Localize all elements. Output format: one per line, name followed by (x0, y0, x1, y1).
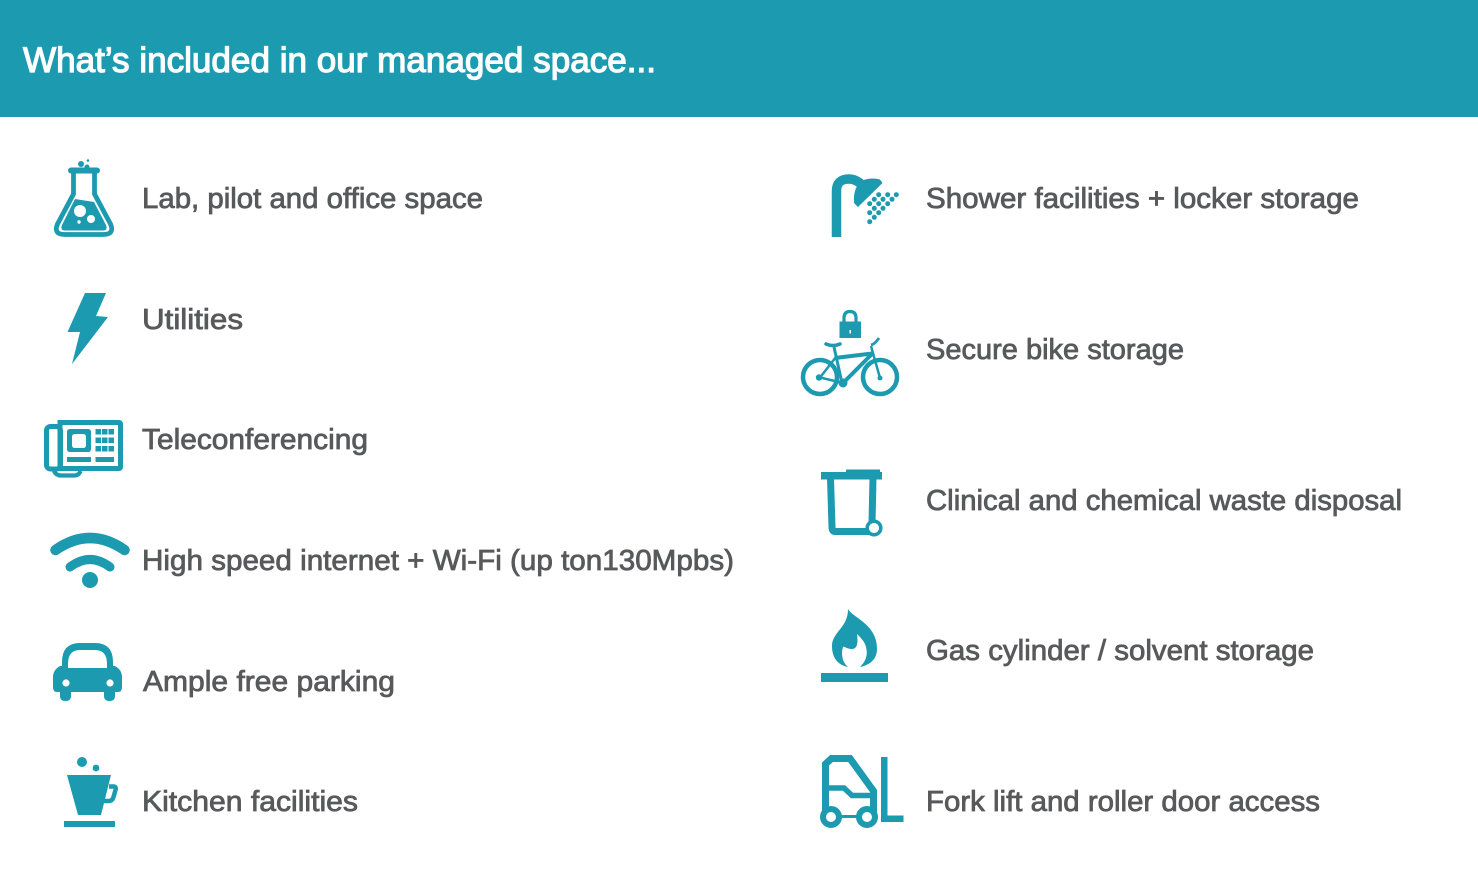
icon: wifi (56, 538, 124, 588)
label: gas storage: Gas cylinder / solvent storage (926, 635, 1314, 667)
label: parking: Ample free parking (143, 666, 395, 698)
label: internet: High speed internet + Wi-Fi (up ton130Mpbs) (142, 545, 734, 577)
label: bike storage: Secure bike storage (926, 334, 1184, 366)
label: shower: Shower facilities + locker storage (926, 183, 1359, 215)
label: waste disposal: Clinical and chemical waste disposal (926, 485, 1402, 517)
icon: lab flask (56, 159, 112, 234)
icon: forklift (823, 757, 904, 825)
label: teleconferencing: Teleconferencing (142, 424, 368, 456)
icon: wheelie bin (821, 470, 882, 535)
label: lab space: Lab, pilot and office space (142, 183, 483, 215)
icon: car (53, 643, 122, 701)
icon: coffee cup (64, 757, 116, 827)
icon: lightning bolt (68, 293, 108, 364)
label: utilities: Utilities (142, 304, 243, 336)
label: forklift access: Fork lift and roller door access (926, 786, 1320, 818)
icon: padlock and bicycle (803, 312, 897, 394)
title: What’s included in our managed space... (23, 41, 656, 80)
icon: shower (836, 178, 899, 237)
icon: conference phone (46, 422, 120, 476)
header band (0, 0, 1478, 117)
icon: gas flame (821, 609, 888, 682)
label: kitchen: Kitchen facilities (142, 786, 358, 818)
